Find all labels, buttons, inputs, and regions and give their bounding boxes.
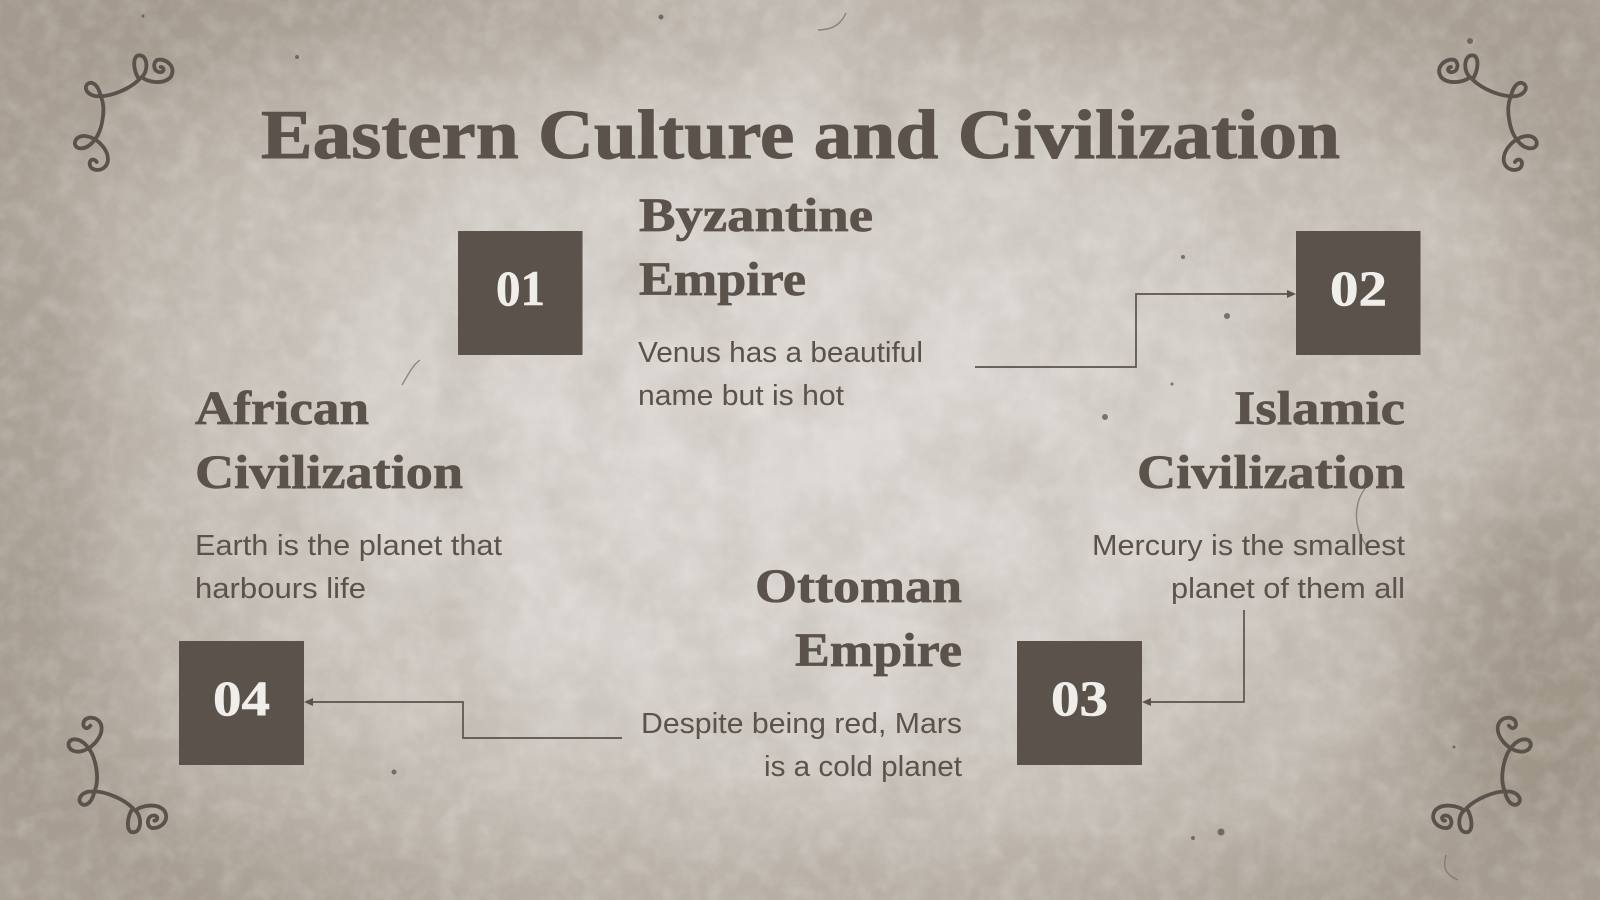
ornament: bottom right bbox=[1433, 718, 1531, 832]
arrow: Byzantine to box 02 bbox=[975, 290, 1296, 367]
number box 01 bbox=[458, 231, 582, 355]
heading: Islamic Civilization: Civilization bbox=[1137, 446, 1405, 499]
heading: Ottoman Empire: Ottoman bbox=[755, 560, 962, 613]
ornament: top right bbox=[1439, 55, 1537, 170]
title: Eastern Culture and Civilization bbox=[261, 97, 1340, 174]
heading: African Civilization: Civilization bbox=[195, 446, 463, 499]
ornament: bottom left bbox=[69, 718, 166, 832]
number box 03 bbox=[1017, 641, 1142, 765]
number box 04: 04 bbox=[213, 670, 270, 726]
text: Ottoman description: is a cold planet bbox=[764, 751, 962, 783]
number box 04 bbox=[179, 641, 304, 765]
heading: Byzantine Empire bbox=[639, 189, 873, 306]
panel: African Civilization bbox=[179, 382, 502, 765]
text: Ottoman description bbox=[641, 708, 962, 783]
heading: Islamic Civilization bbox=[1137, 382, 1405, 499]
arrow: Ottoman to box 04 bbox=[304, 698, 622, 738]
heading: Byzantine Empire: Byzantine bbox=[639, 189, 873, 242]
ornament: top left bbox=[75, 55, 172, 170]
text: Ottoman description: Despite being red, Mars bbox=[641, 708, 962, 740]
number box 03: 03 bbox=[1051, 670, 1108, 726]
text: African description bbox=[195, 530, 502, 605]
heading: Islamic Civilization: Islamic bbox=[1234, 382, 1405, 435]
heading: Byzantine Empire: Empire bbox=[639, 253, 806, 306]
panel: Islamic Civilization bbox=[1092, 231, 1420, 605]
panel: Byzantine Empire bbox=[458, 189, 923, 412]
heading: African Civilization bbox=[195, 382, 463, 499]
text: Byzantine description bbox=[638, 337, 923, 412]
number box 01: 01 bbox=[496, 260, 545, 316]
heading: Ottoman Empire: Empire bbox=[795, 624, 962, 677]
text: Byzantine description: name but is hot bbox=[638, 380, 844, 412]
number box 02 bbox=[1296, 231, 1420, 355]
text: African description: harbours life bbox=[195, 573, 366, 605]
text: African description: Earth is the planet that bbox=[195, 530, 502, 562]
text: Islamic description bbox=[1092, 530, 1405, 605]
panel: Ottoman Empire bbox=[641, 560, 1142, 783]
number box 02: 02 bbox=[1330, 260, 1387, 316]
heading: African Civilization: African bbox=[195, 382, 369, 435]
arrow: Islamic to box 03 bbox=[1142, 610, 1244, 706]
text: Byzantine description: Venus has a beautiful bbox=[638, 337, 923, 369]
text: Islamic description: planet of them all bbox=[1171, 573, 1405, 605]
heading: Ottoman Empire bbox=[755, 560, 962, 677]
text: Islamic description: Mercury is the smallest bbox=[1092, 530, 1405, 562]
